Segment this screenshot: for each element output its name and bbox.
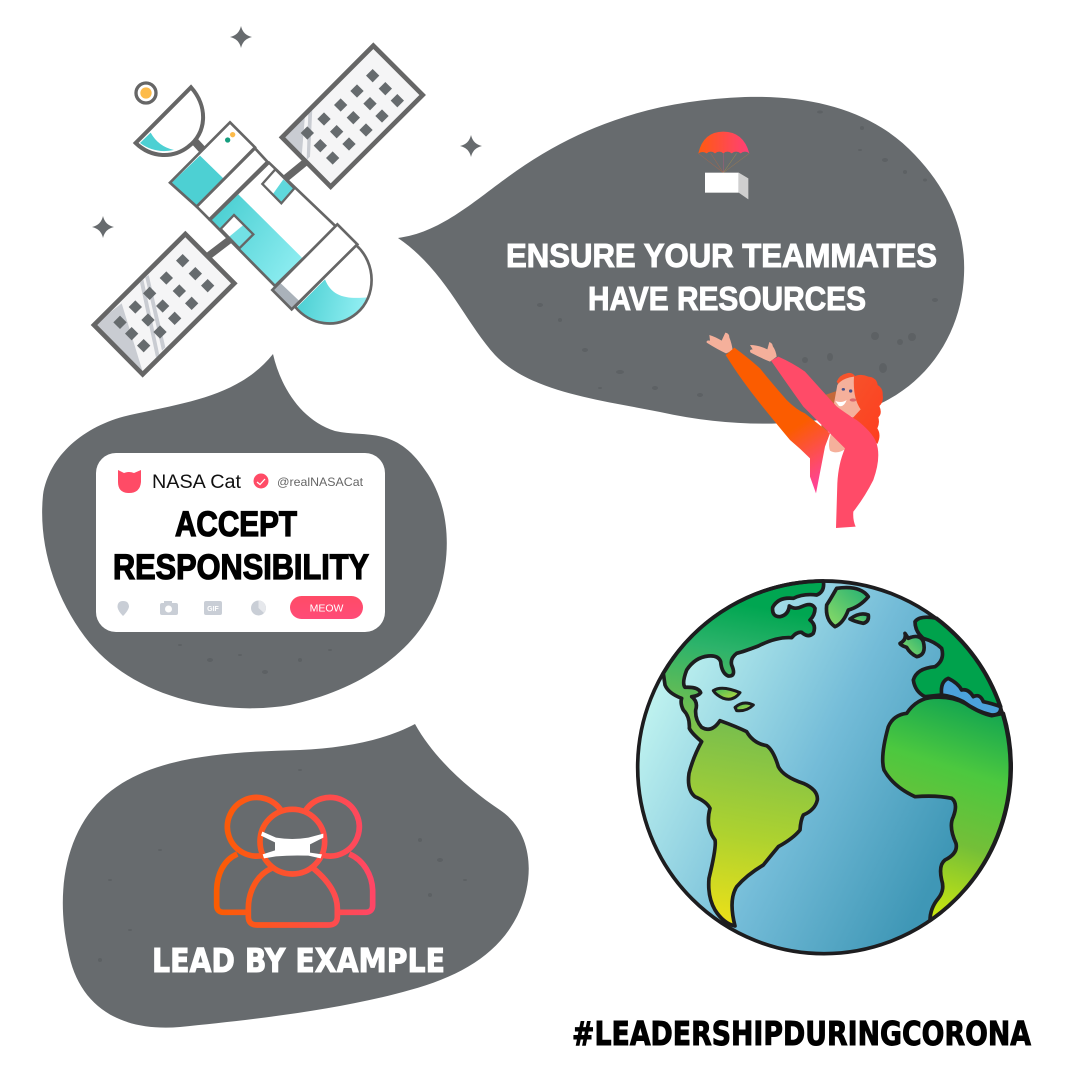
- icon: parachute with box: [698, 132, 749, 199]
- mask: [261, 832, 323, 858]
- hand right: [750, 342, 777, 362]
- icon: gif: [204, 601, 222, 615]
- satellite head module: [170, 122, 267, 219]
- woman reaching up: [707, 333, 883, 528]
- heading: ensure your teammates have resources: HAVE RESOURCES: [588, 280, 866, 317]
- meow button: MEOW: [310, 602, 344, 614]
- solar panel upper: [282, 46, 423, 187]
- pink sleeve and torso: [771, 357, 878, 528]
- icon: camera: [160, 601, 178, 615]
- iceland: [850, 614, 868, 623]
- connector arms: [208, 162, 306, 256]
- caribbean islands: [713, 688, 753, 711]
- orange sleeve: [726, 348, 830, 493]
- satellite: [94, 46, 423, 374]
- icon: pie: [251, 600, 266, 616]
- mediterranean: [941, 678, 1001, 715]
- hair: [837, 373, 883, 444]
- hair back: [821, 391, 838, 432]
- heading: accept responsibility: ACCEPT: [175, 505, 297, 544]
- heading: lead by example: LEAD BY EXAMPLE: [152, 941, 445, 980]
- face: [834, 377, 861, 417]
- star top: [230, 26, 252, 48]
- solar panel lower: [94, 234, 234, 374]
- icon: pin: [118, 601, 129, 616]
- hand left: [707, 333, 733, 353]
- satellite main body: [210, 163, 336, 286]
- dish beacon: [136, 83, 156, 103]
- icon: cat: [118, 470, 141, 493]
- speech bubble: resources: [398, 97, 964, 424]
- speech bubble: accept responsibility: [42, 354, 447, 708]
- heading: accept responsibility: RESPONSIBILITY: [113, 548, 369, 587]
- heading: accept responsibility: [113, 505, 369, 587]
- meow button: [290, 596, 363, 619]
- icon: gif: GIF: [207, 606, 220, 613]
- name: NASA Cat: [152, 472, 242, 493]
- africa: [883, 697, 1011, 921]
- heading: ensure your teammates have resources: ENSURE YOUR TEAMMATES: [506, 237, 937, 274]
- greenland: [826, 588, 868, 627]
- star left: [92, 216, 114, 238]
- globe outline: [638, 581, 1010, 954]
- icon: masked people: [217, 797, 373, 925]
- britain: [900, 633, 924, 657]
- icon: verified check: [254, 474, 268, 488]
- tweet card: [96, 453, 385, 632]
- dish: [136, 87, 203, 155]
- heading: ensure your teammates have resources: [506, 237, 937, 317]
- globe: [638, 581, 1011, 954]
- speech bubble: lead by example: [63, 724, 529, 1028]
- satellite end cap: [272, 224, 372, 323]
- neck and chest: [829, 432, 847, 452]
- star right: [460, 135, 482, 157]
- handle: @realNASACat: [277, 475, 364, 489]
- europe: [913, 617, 1001, 707]
- ocean: [638, 581, 1010, 954]
- americas: [663, 581, 824, 926]
